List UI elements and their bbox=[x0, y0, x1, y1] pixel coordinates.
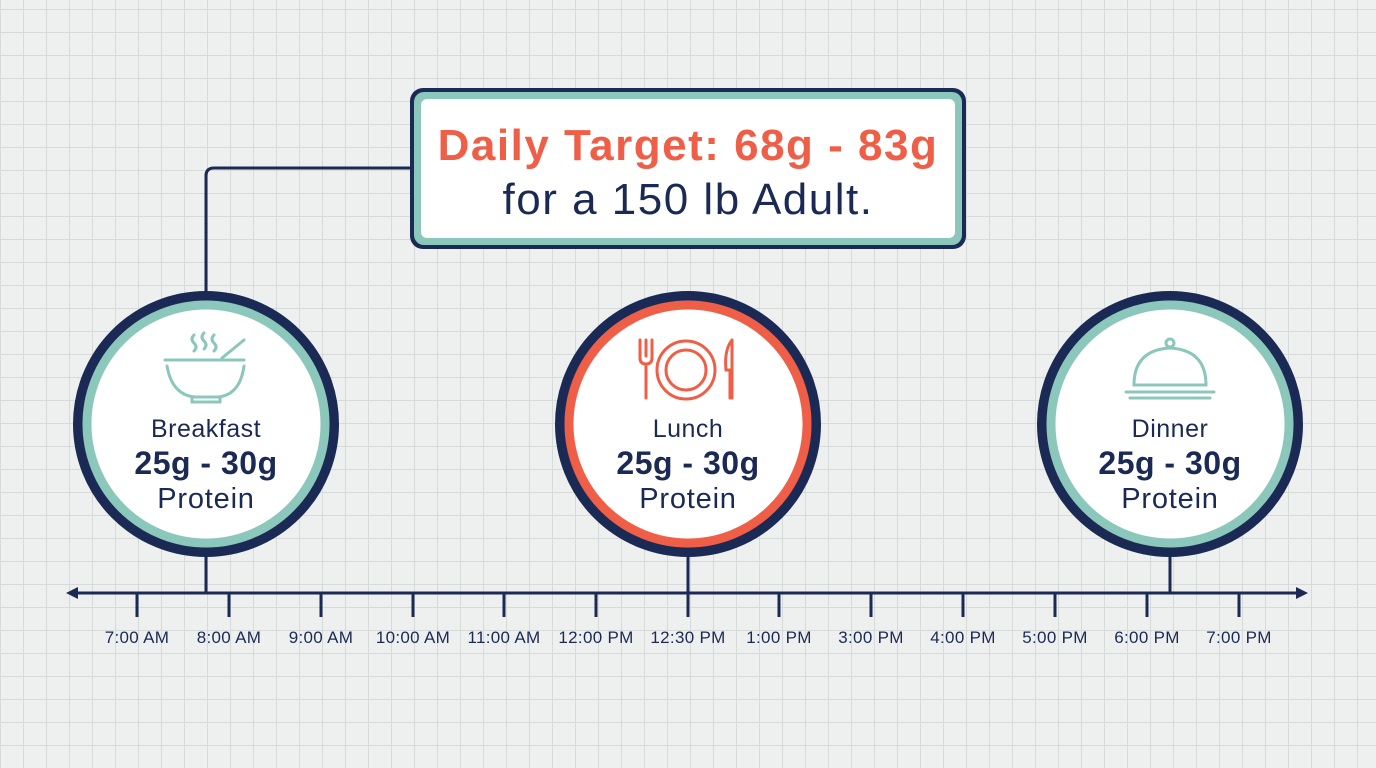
circle: lunch: Protein bbox=[639, 483, 737, 515]
daily target box bbox=[410, 88, 966, 249]
icon: bowl bbox=[165, 333, 244, 402]
time labels: 9:00 AM bbox=[289, 628, 353, 647]
circle: lunch bbox=[560, 296, 816, 552]
daily target box: for a 150 lb Adult. bbox=[503, 175, 873, 224]
icon: cloche bbox=[1126, 339, 1214, 398]
circle: dinner: Protein bbox=[1121, 483, 1219, 515]
circle: breakfast: Protein bbox=[157, 483, 255, 515]
time labels: 5:00 PM bbox=[1022, 628, 1088, 647]
time labels bbox=[105, 628, 1272, 647]
time labels: 8:00 AM bbox=[197, 628, 261, 647]
time labels: 3:00 PM bbox=[838, 628, 904, 647]
time labels: 7:00 PM bbox=[1206, 628, 1272, 647]
icon: plate and cutlery bbox=[640, 340, 732, 399]
time labels: 12:30 PM bbox=[650, 628, 726, 647]
circle: dinner: Dinner bbox=[1132, 415, 1208, 443]
circle: dinner: 25g - 30g bbox=[1098, 445, 1242, 481]
time labels: 12:00 PM bbox=[558, 628, 634, 647]
daily target box: Daily Target: 68g - 83g bbox=[438, 121, 938, 170]
time labels: 11:00 AM bbox=[468, 628, 540, 647]
circle: lunch: Lunch bbox=[653, 415, 723, 443]
circle: breakfast: 25g - 30g bbox=[134, 445, 278, 481]
time labels: 1:00 PM bbox=[746, 628, 812, 647]
time labels: 7:00 AM bbox=[105, 628, 169, 647]
connector: target to breakfast bbox=[206, 168, 410, 292]
timeline axis bbox=[66, 555, 1308, 617]
time labels: 6:00 PM bbox=[1114, 628, 1180, 647]
circle: lunch: 25g - 30g bbox=[616, 445, 760, 481]
time labels: 4:00 PM bbox=[930, 628, 996, 647]
time labels: 10:00 AM bbox=[376, 628, 450, 647]
circle: breakfast bbox=[78, 296, 334, 552]
circle: dinner bbox=[1042, 296, 1298, 552]
circle: breakfast: Breakfast bbox=[151, 415, 261, 443]
